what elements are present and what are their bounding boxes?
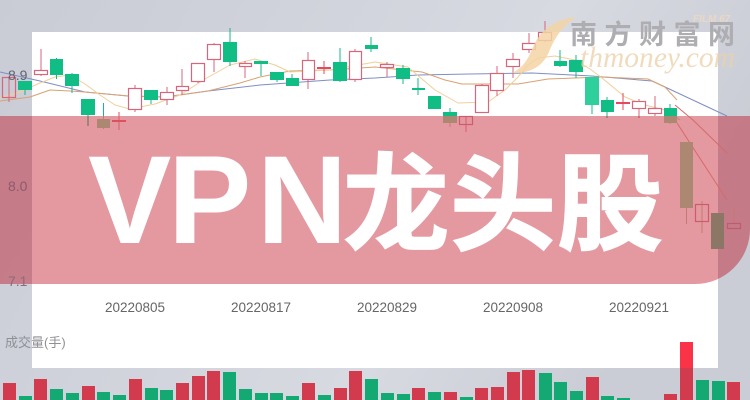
moving average lines [0,56,727,120]
x axis dates: 20220921 [609,300,669,315]
title [88,131,663,270]
pink title band [0,116,750,284]
hollow red bodies [2,32,662,114]
x axis dates [105,300,669,315]
y axis label 7.1: 7.1 [8,273,28,289]
green bodies [18,42,677,116]
candles seen through the band [97,105,740,249]
red volume bars [3,368,740,400]
white chart panel [32,32,718,368]
red crosses [317,67,630,104]
x axis dates: 20220908 [483,300,543,315]
candlesticks [2,21,677,126]
title chinese part: 龙头股 [343,147,663,265]
volume bars [3,342,740,400]
wicks [9,21,670,126]
y axis label 8.0: 8.0 [8,178,28,194]
watermark: small code: FILM 67 [693,14,731,25]
x axis dates: 20220805 [105,300,165,315]
title latin part: VPN [88,131,347,270]
green volume bars [19,372,725,400]
watermark: orange swoosh [512,17,576,73]
tall bright red volume bar [680,342,693,368]
x axis dates: 20220817 [231,300,291,315]
watermark: eastmoney url: thmoney.com [580,41,735,74]
y axis label 8.9: 8.9 [8,67,28,83]
watermark: brand name: 南方财富网 [570,19,735,50]
x axis dates: 20220829 [357,300,417,315]
volume label: 成交量(手) [5,335,66,350]
